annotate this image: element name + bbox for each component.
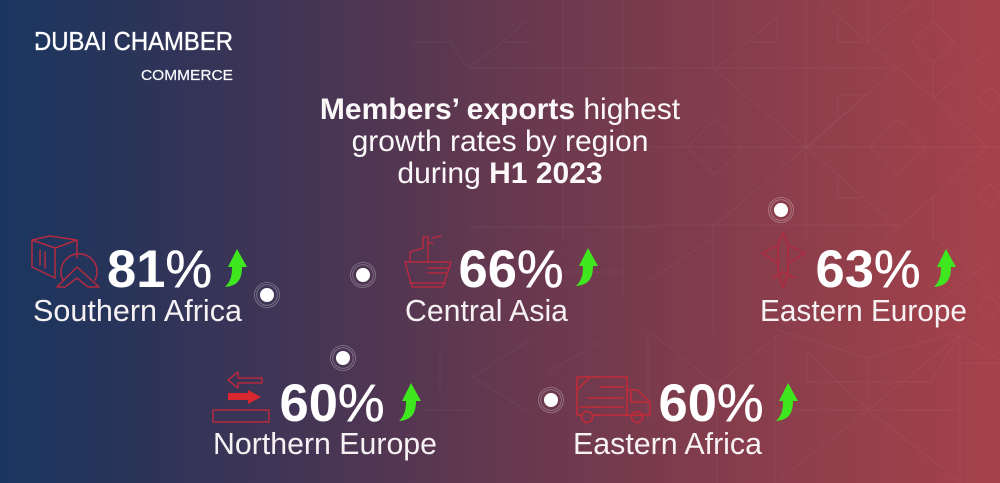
logo wordmark: DUBAI CHAMBER [34,28,233,56]
icon: airplane [763,233,805,288]
icon: delivery truck [577,377,650,422]
value: 66%: 66% [458,240,564,299]
stat: Eastern Africa [573,374,798,461]
title: growth rates by region [352,125,648,158]
arrow up [399,383,421,421]
label: Eastern Africa [573,427,762,461]
value: 63%: 63% [816,240,921,299]
icon: cargo ship [405,236,451,287]
arrow up [225,249,247,287]
logo sub-brand: COMMERCE [141,68,233,84]
stat: Northern Europe [213,372,437,461]
logo: Dubai Chamber Commerce [33,28,233,84]
marker dot [768,198,794,222]
label: Central Asia [405,294,568,328]
label: Eastern Europe [760,294,967,328]
value: 60%: 60% [658,374,764,433]
marker dot [538,388,564,412]
logo D opening [33,36,39,44]
arrow up [576,248,598,286]
stat: Central Asia [405,236,598,328]
icon: box with up chevrons [32,236,99,287]
title: during H1 2023 [397,157,603,190]
stat: Eastern Europe [760,233,967,328]
icon: exchange arrows over platform [213,372,269,422]
marker dot [350,262,376,288]
label: Southern Africa [33,294,242,328]
value: 81%: 81% [107,240,212,299]
background geometric pattern [413,0,1000,483]
arrow up [776,383,798,421]
arrow up [934,249,956,287]
marker dot [254,282,280,308]
title [320,93,681,190]
label: Northern Europe [213,427,437,461]
stat: Southern Africa [32,236,247,328]
title: Members’ exports highest [320,93,681,126]
marker dot [330,346,356,370]
value: 60%: 60% [280,374,385,433]
